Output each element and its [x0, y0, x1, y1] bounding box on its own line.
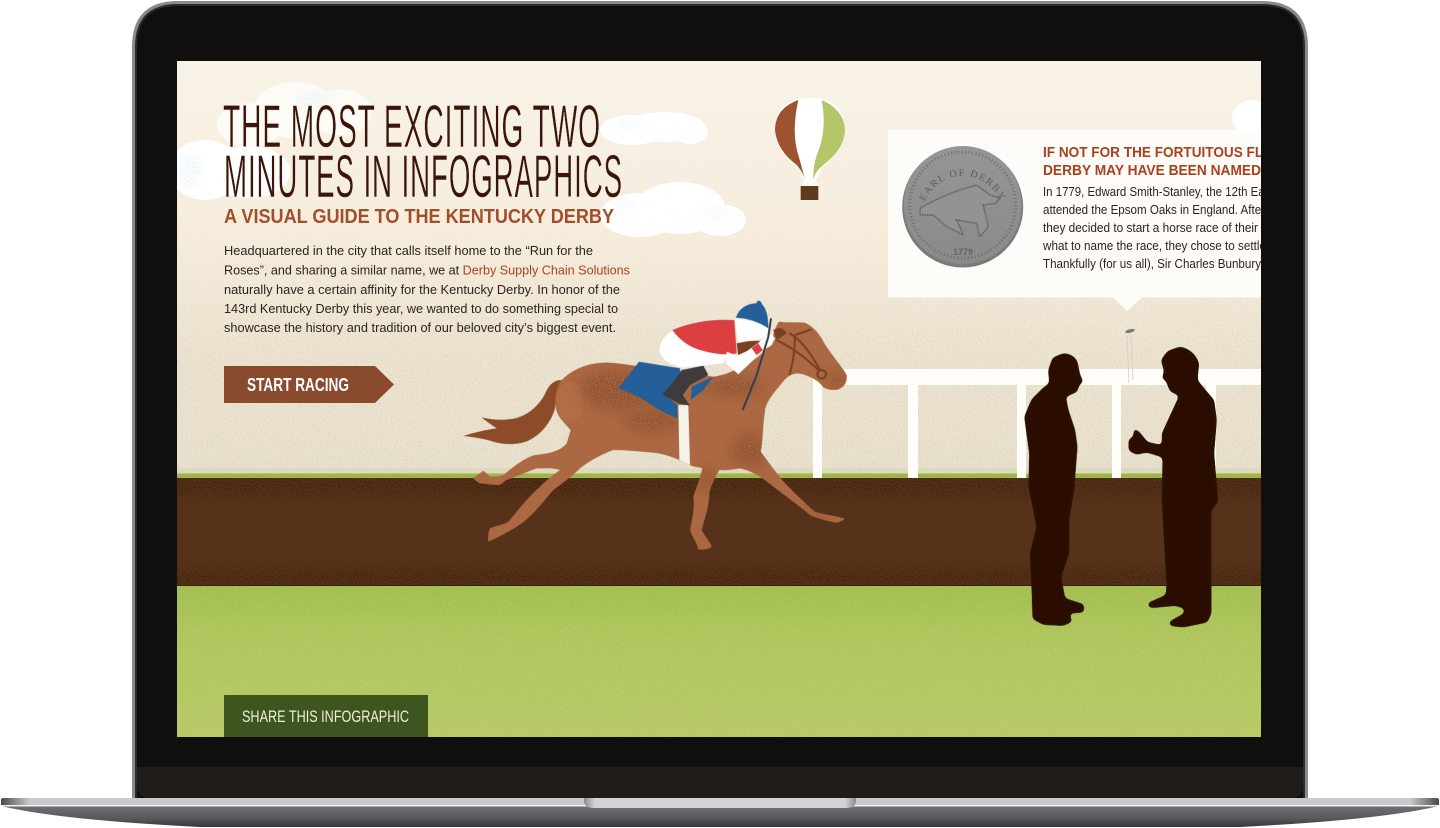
- callout heading and body: what to name the race, they chose to settle: [1042, 239, 1266, 253]
- grass: [177, 586, 1261, 737]
- intro paragraph: showcase the history and tradition of our beloved city’s biggest event.: [224, 320, 616, 335]
- coin: EARL OF DERBY: [919, 169, 1006, 201]
- riding crop: [743, 318, 771, 410]
- intro paragraph: naturally have a certain affinity for the Kentucky Derby. In honor of the: [224, 282, 620, 297]
- bridle: [777, 329, 826, 379]
- jockey arm: [726, 348, 759, 374]
- two men silhouettes: [1024, 347, 1218, 627]
- dirt track: [170, 472, 1270, 588]
- fence: [813, 369, 1261, 478]
- coin: [902, 146, 1024, 268]
- jockey boot: [662, 366, 708, 406]
- jockey skin: [737, 341, 761, 357]
- man right: [1129, 347, 1218, 627]
- screen: hero scene: [169, 61, 1272, 737]
- infield stripe: [177, 474, 1261, 478]
- intro paragraph: 143rd Kentucky Derby this year, we wanted to do something special to: [224, 301, 618, 316]
- horse body: [473, 321, 847, 550]
- laptop body: [132, 1, 1308, 798]
- paper grain: [177, 259, 1261, 468]
- jockey shirt: [672, 320, 737, 354]
- sky background: [177, 61, 1261, 478]
- intro paragraph: Headquartered in the city that calls itself home to the “Run for the: [224, 243, 593, 258]
- man left: [1024, 353, 1084, 626]
- coin: 1779: [953, 247, 973, 257]
- intro paragraph: [224, 243, 630, 335]
- laptop base: [1, 798, 1439, 827]
- callout heading and body: Thankfully (for us all), Sir Charles Bunbury: [1043, 257, 1262, 271]
- horse tail: [463, 380, 562, 444]
- jockey head: [735, 319, 768, 343]
- flipped coin: [1125, 328, 1135, 383]
- info callout panel: [888, 130, 1276, 311]
- callout heading and body: attended the Epsom Oaks in England. After: [1043, 203, 1265, 217]
- jockey cap: [736, 301, 768, 328]
- jockey: [659, 301, 775, 410]
- callout heading and body: they decided to start a horse race of their: [1043, 221, 1258, 235]
- clouds: [169, 82, 1272, 237]
- saddle cloth: [618, 362, 713, 418]
- text: MINUTES IN INFOGRAPHICS: [224, 143, 623, 210]
- share button: SHARE THIS INFOGRAPHIC: [242, 707, 409, 726]
- callout heading and body: DERBY MAY HAVE BEEN NAMED: [1043, 162, 1261, 179]
- girth: [678, 405, 690, 465]
- hot air balloon: [775, 98, 845, 200]
- start racing button: [224, 366, 394, 403]
- callout heading and body: [1042, 144, 1276, 271]
- horse and jockey: [463, 301, 847, 550]
- text: THE MOST EXCITING TWO: [223, 93, 601, 160]
- title: [223, 93, 623, 210]
- start racing button: START RACING: [247, 375, 349, 395]
- intro paragraph: Roses”, and sharing a similar name, we at Derby Supply Chain Solutions: [224, 262, 630, 278]
- subtitle: A VISUAL GUIDE TO THE KENTUCKY DERBY: [224, 205, 614, 228]
- jockey pants: [659, 330, 728, 368]
- share button: [224, 695, 428, 737]
